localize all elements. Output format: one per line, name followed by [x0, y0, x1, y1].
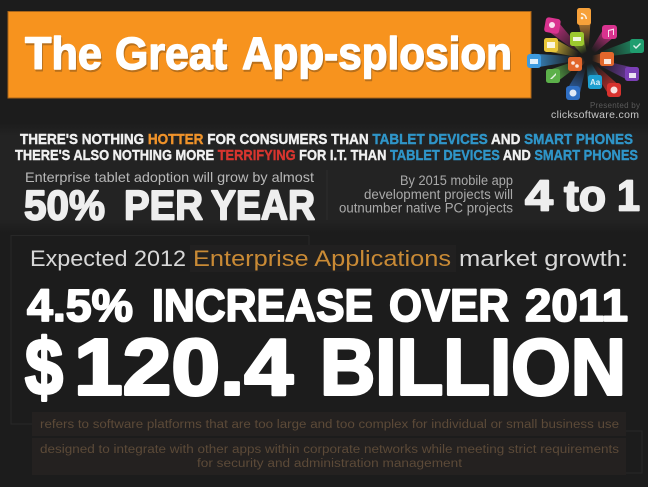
icon: yellow folder: [544, 38, 589, 65]
stat: tablet adoption: YEAR: [211, 182, 315, 228]
market growth heading: Enterprise Applications: [193, 246, 451, 271]
definition note 1: refers to software platforms that are too large and too complex for individual or small business use: [40, 419, 619, 431]
headline statement: THERE'S NOTHING HOTTER FOR CONSUMERS THAN TABLET DEVICES AND SMART PHONES: [20, 132, 633, 148]
icon: rss: [577, 8, 594, 58]
market value: 120.4: [74, 322, 294, 412]
icon: share links: [568, 52, 590, 71]
headline statement: THERE'S ALSO NOTHING MORE TERRIFYING FOR I.T. THAN TABLET DEVICES AND SMART PHONES: [15, 148, 638, 164]
market growth heading: market growth:: [459, 246, 628, 271]
growth percentage: [27, 280, 628, 331]
growth percentage: 2011: [525, 280, 628, 331]
growth percentage: OVER: [389, 280, 509, 331]
logo: exploding app icons: [527, 8, 644, 100]
definition note 2: [32, 438, 626, 475]
icon: green tools: [546, 52, 590, 83]
market value: $: [25, 322, 63, 412]
ratio number: [525, 172, 640, 220]
ratio number: 1: [617, 172, 640, 220]
market value: BILLION: [320, 322, 626, 412]
definition note 2: for security and administration management: [197, 458, 463, 470]
title banner: [8, 12, 531, 98]
title text: Great: [115, 28, 227, 79]
definition note 1: [32, 412, 626, 436]
icon: red badge: [582, 54, 621, 97]
icon: check: [585, 39, 644, 65]
ratio number: to: [564, 172, 606, 220]
icon: globe: [566, 55, 593, 100]
title text: [25, 28, 512, 79]
icon: unlocked padlock: [587, 51, 614, 66]
stat: mobile vs PC projects: outnumber native PC projects: [339, 200, 513, 216]
icon: speech bubble: [544, 17, 592, 63]
presented by credit: Presented by: [590, 101, 640, 110]
presented by credit: [551, 101, 640, 121]
stat: tablet adoption: PER: [124, 182, 203, 228]
headline statement: [15, 132, 638, 164]
icon glyphs: Aa: [590, 78, 601, 87]
presented by credit: clicksoftware.com: [551, 109, 639, 121]
stat: tablet adoption: [24, 169, 315, 228]
icon: camera: [527, 51, 587, 68]
icon: padlock: [585, 51, 639, 81]
growth percentage: 4.5%: [27, 280, 133, 331]
icon: music: [582, 25, 617, 63]
stat: tablet adoption: 50%: [24, 182, 105, 228]
stat: mobile vs PC projects: [339, 172, 640, 220]
stat: mobile vs PC projects: development projects will: [364, 187, 513, 202]
market value: [25, 322, 626, 412]
stat: tablet adoption: Enterprise tablet adoption will grow by almost: [25, 169, 314, 185]
market growth heading: Expected 2012: [30, 246, 186, 271]
icon: text Aa: [580, 56, 602, 89]
market growth heading: [30, 245, 628, 272]
stat: mobile vs PC projects: By 2015 mobile app: [400, 173, 513, 188]
title text: App-splosion: [242, 28, 512, 79]
icon: cart: [570, 32, 593, 61]
growth percentage: INCREASE: [152, 280, 373, 331]
title text: The: [25, 28, 102, 79]
definition note 2: designed to integrate with other apps within corporate networks while meeting strict requirements: [40, 444, 619, 456]
ratio number: 4: [525, 172, 554, 220]
